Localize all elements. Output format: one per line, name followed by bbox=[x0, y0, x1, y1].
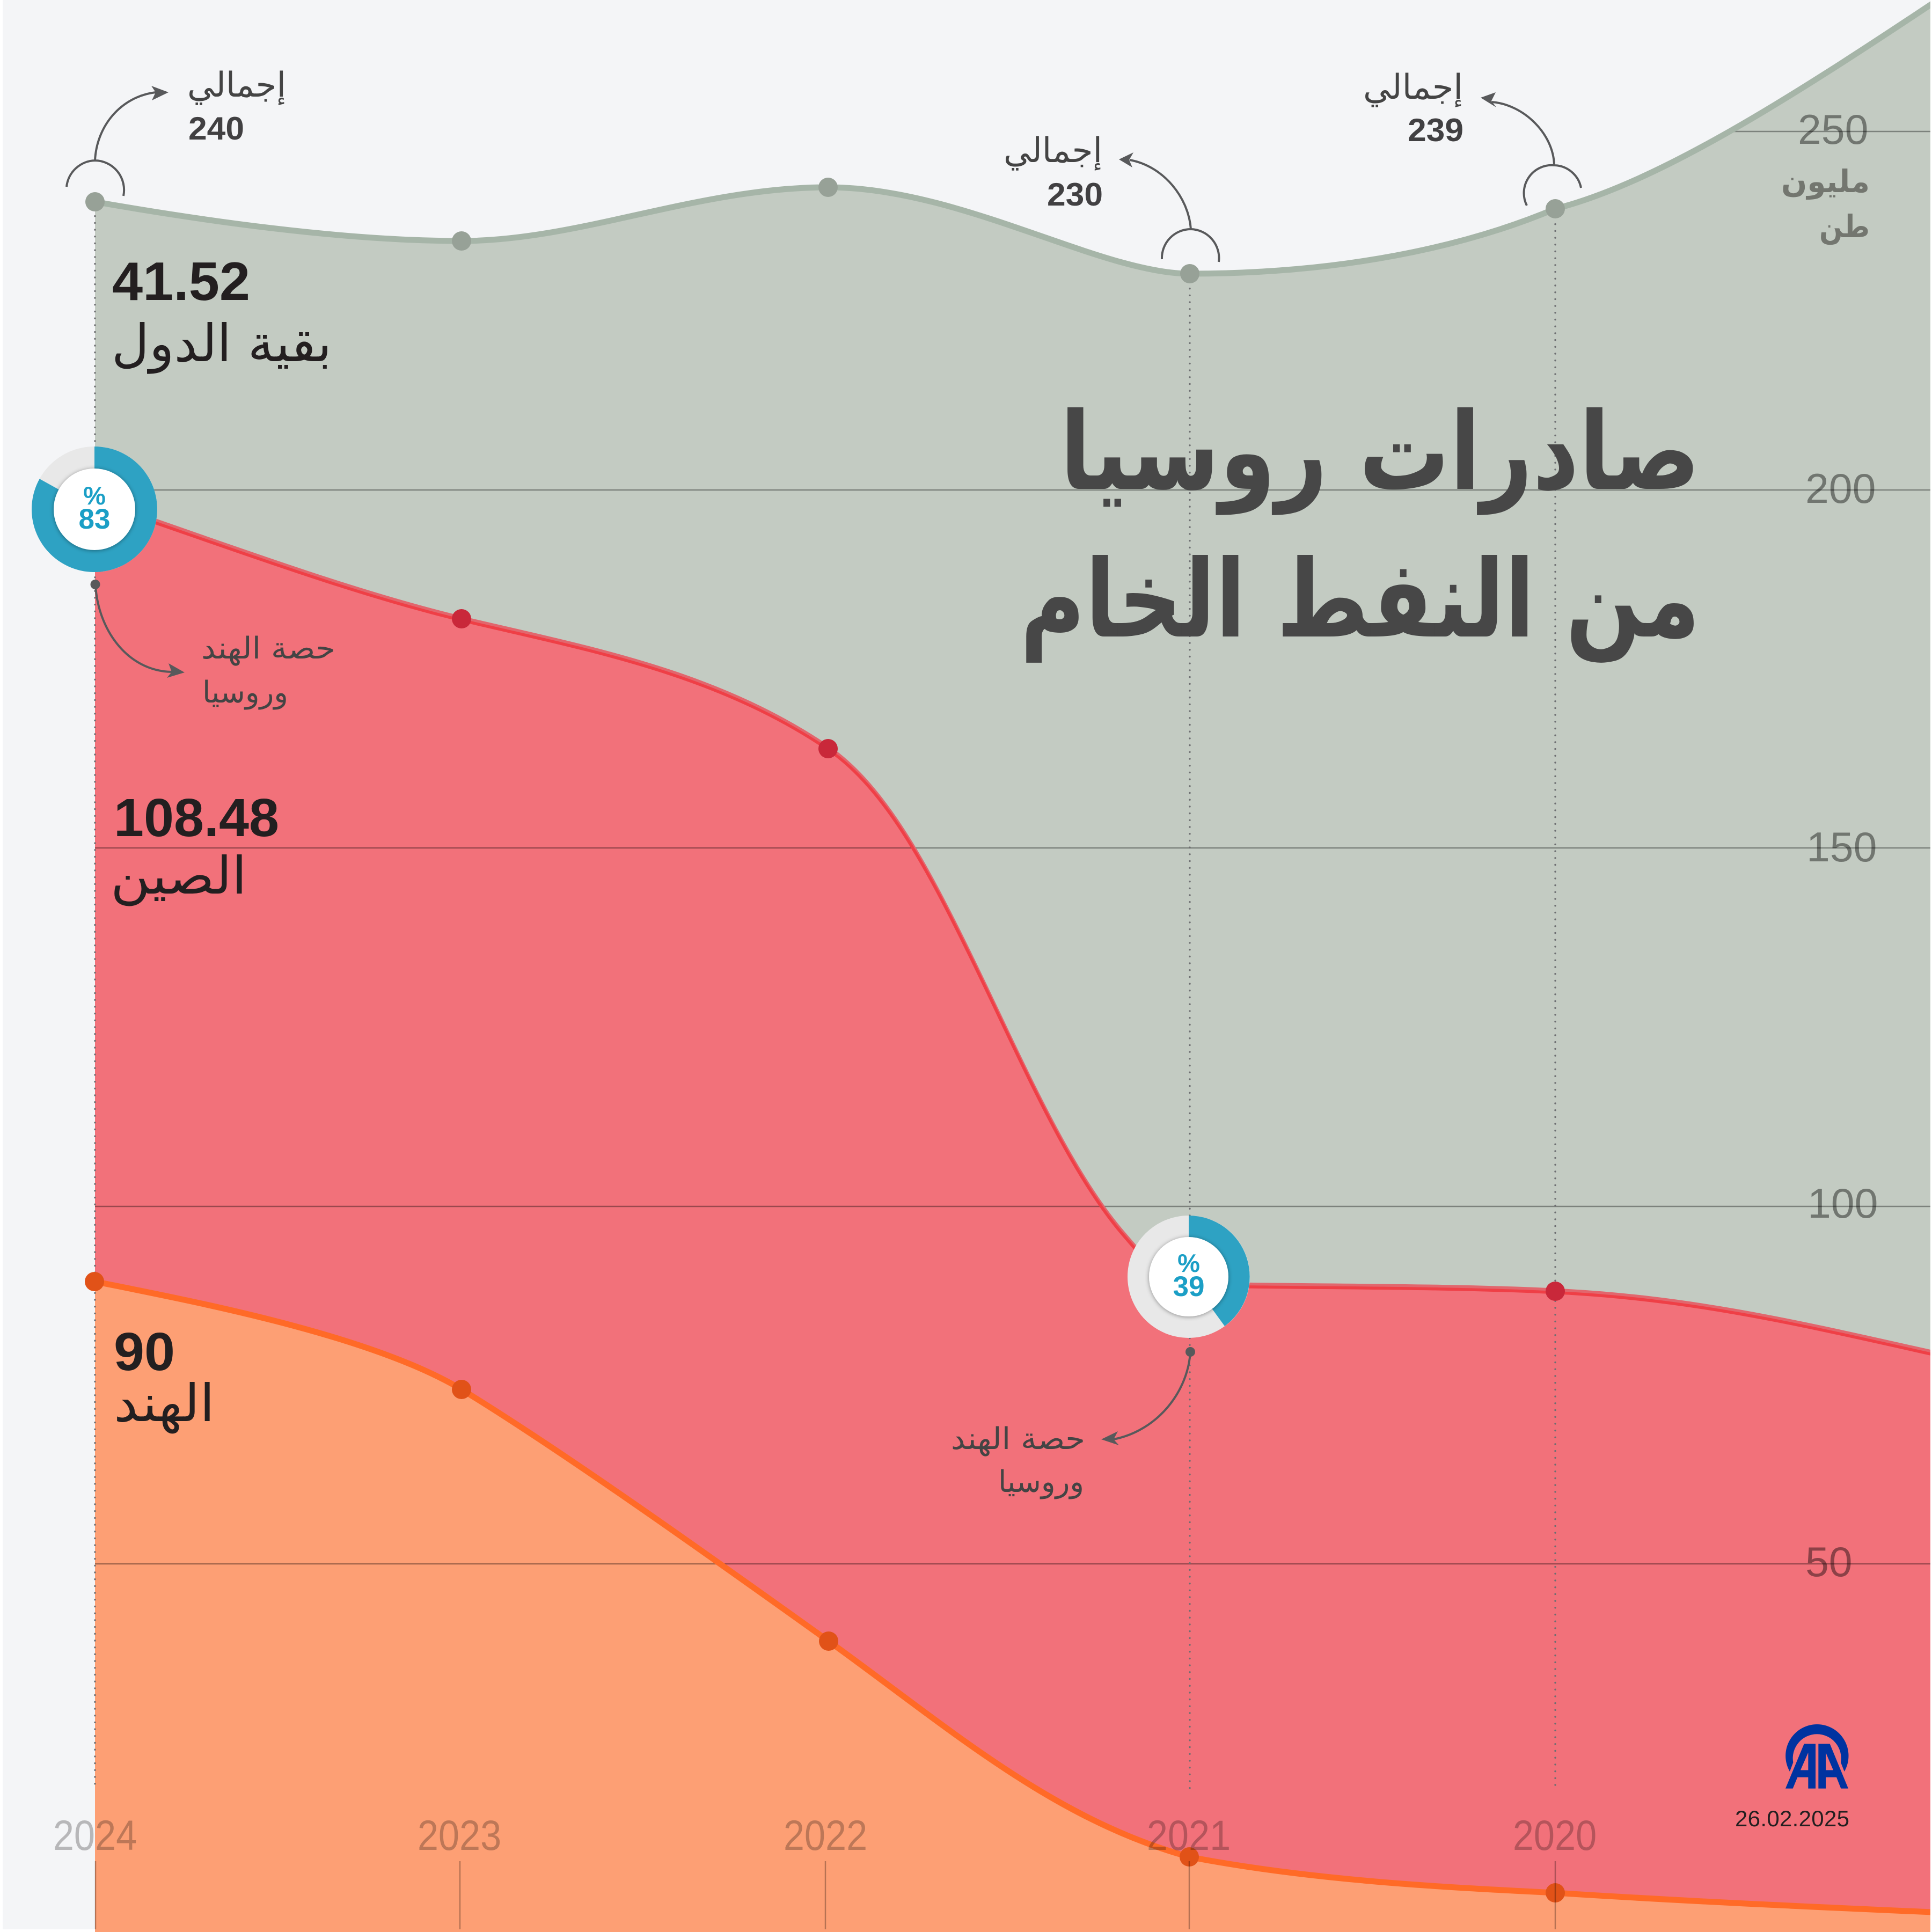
date: 26.02.2025 bbox=[1735, 1806, 1849, 1831]
logo: Anadolu Agency bbox=[1785, 1724, 1848, 1789]
dotted year guide lines bbox=[95, 209, 1555, 1788]
value: China bbox=[111, 788, 279, 906]
x axis years and ticks: 2022 bbox=[784, 1811, 867, 1859]
markers: India bbox=[85, 1272, 1565, 1902]
right axis labels: 250 bbox=[1798, 106, 1868, 153]
right axis labels: 150 bbox=[1806, 823, 1877, 870]
right axis labels: 100 bbox=[1807, 1180, 1878, 1227]
x axis years and ticks: 2021 bbox=[1147, 1811, 1231, 1859]
callout: total 2021: 230 bbox=[1047, 177, 1103, 213]
value: China: الصين bbox=[111, 846, 247, 906]
right axis labels: 50 bbox=[1805, 1538, 1853, 1585]
callout: India and Russia share 2024: حصة الهند bbox=[201, 631, 335, 666]
area: China bbox=[95, 501, 1932, 1932]
callout: total 2024: 240 bbox=[188, 111, 244, 147]
right axis labels: 200 bbox=[1805, 465, 1876, 512]
title bbox=[1020, 390, 1700, 663]
x axis years and ticks: 2023 bbox=[418, 1811, 501, 1859]
donut: India share 2024, 83 percent bbox=[32, 447, 157, 572]
line: total exports bbox=[95, 4, 1932, 274]
donut: India share 2021, 39 percent: 39 bbox=[1173, 1271, 1204, 1302]
area: India bbox=[95, 1282, 1932, 1932]
value: rest of countries bbox=[112, 252, 332, 374]
callout: India and Russia share 2024 bbox=[90, 580, 335, 710]
value: China: 108.48 bbox=[114, 788, 279, 848]
callout: India and Russia share 2021: حصة الهند bbox=[951, 1422, 1085, 1457]
value: India bbox=[114, 1322, 215, 1433]
markers: China bbox=[452, 609, 1565, 1301]
axis unit: طن bbox=[1819, 208, 1870, 245]
donut: India share 2024, 83 percent: 83 bbox=[79, 503, 110, 535]
callout: total 2021 bbox=[1004, 131, 1219, 262]
x axis years and ticks: 2024 bbox=[53, 1811, 137, 1859]
donut: India share 2021, 39 percent bbox=[1128, 1216, 1250, 1338]
callout: total 2024: إجمالي bbox=[187, 65, 286, 105]
title: صادرات روسيا bbox=[1060, 390, 1700, 515]
callout: India and Russia share 2021: وروسيا bbox=[998, 1465, 1084, 1499]
x axis years and ticks: 2020 bbox=[1513, 1811, 1597, 1859]
markers: total exports bbox=[85, 178, 1565, 283]
value: rest of countries: 41.52 bbox=[112, 252, 250, 312]
callout: total 2020: إجمالي bbox=[1363, 68, 1463, 107]
value: India: الهند bbox=[114, 1373, 215, 1433]
callout: total 2020 bbox=[1363, 68, 1581, 206]
axis unit: مليون bbox=[1781, 163, 1870, 200]
value: rest of countries: بقية الدول bbox=[112, 313, 332, 374]
line: China bbox=[95, 499, 1932, 1355]
callout: total 2020: 239 bbox=[1408, 112, 1463, 148]
title: من النفط الخام bbox=[1020, 537, 1700, 663]
right axis labels bbox=[1798, 106, 1878, 1585]
callout: India and Russia share 2024: وروسيا bbox=[202, 675, 288, 710]
callout: total 2021: إجمالي bbox=[1004, 131, 1102, 171]
value: India: 90 bbox=[114, 1322, 175, 1382]
callout: India and Russia share 2021 bbox=[951, 1347, 1195, 1499]
callout: total 2024 bbox=[67, 65, 286, 196]
x axis years and ticks bbox=[53, 1811, 1597, 1929]
line: India bbox=[95, 1282, 1932, 1912]
donut: India share 2021, 39 percent: % bbox=[1177, 1249, 1200, 1277]
axis unit bbox=[1781, 163, 1870, 245]
donut: India share 2024, 83 percent: % bbox=[83, 481, 106, 510]
